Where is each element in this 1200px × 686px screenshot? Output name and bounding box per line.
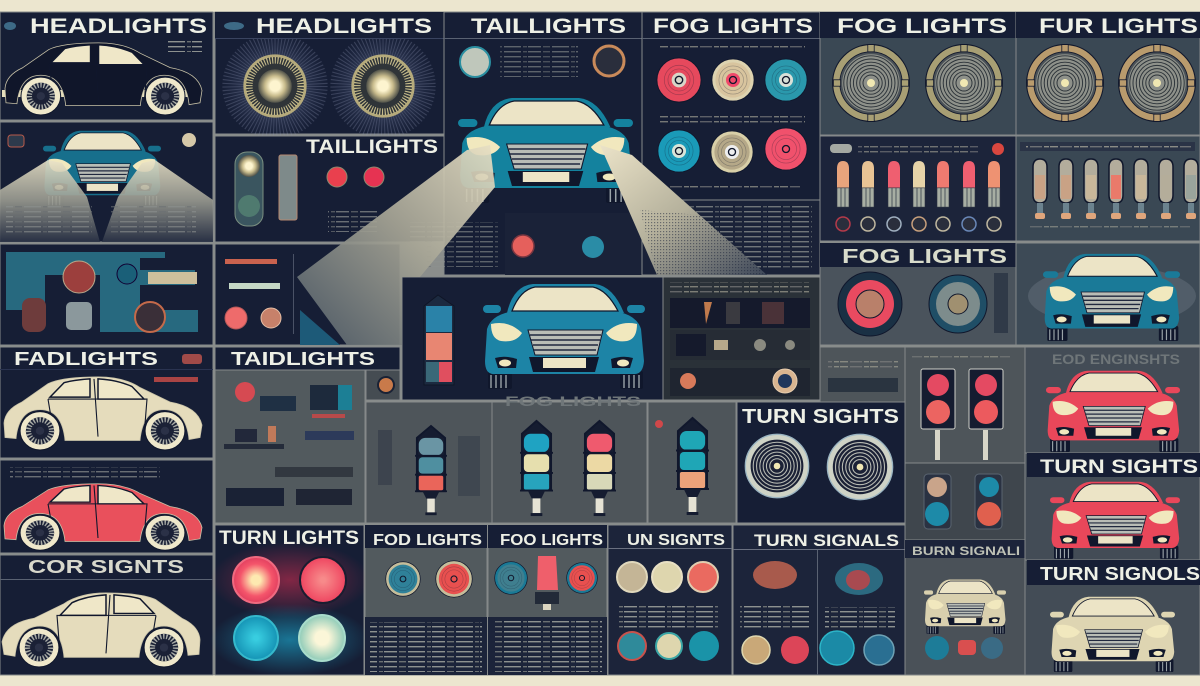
icon: red badge	[182, 354, 202, 364]
header band	[1016, 12, 1200, 38]
heading: taidlights: TAIDLIGHTS	[231, 349, 375, 369]
panel: turn sights red car	[1025, 453, 1200, 560]
lens left	[833, 45, 909, 121]
disc red	[781, 636, 809, 664]
header rule	[733, 549, 905, 550]
lens teal	[765, 59, 807, 101]
heading: un signts: UN SIGNTS	[627, 532, 725, 549]
parts left	[378, 430, 392, 485]
text right	[825, 607, 895, 629]
text block	[488, 617, 607, 675]
disc 2	[652, 562, 682, 592]
text lines	[690, 206, 812, 268]
panel: turn signals	[733, 525, 905, 675]
car: blue	[1043, 254, 1180, 341]
header rule	[0, 579, 213, 580]
strip	[279, 155, 297, 220]
panel: grey bulbs	[1016, 136, 1200, 241]
panel: black car headlights	[0, 12, 213, 120]
signal right	[975, 474, 1002, 529]
heading: turn sights: TURN SIGHTS	[742, 406, 899, 428]
header band	[905, 540, 1025, 558]
panel: dark bulbs	[820, 136, 1016, 241]
label lines	[858, 144, 978, 153]
beam: main right	[600, 145, 767, 275]
heading: fog lights: FOG LIGHTS	[842, 246, 1007, 268]
text lines	[328, 210, 378, 232]
text lines	[10, 467, 160, 479]
heading: burn signali: BURN SIGNALI	[912, 544, 1020, 558]
gauge core	[846, 570, 870, 590]
red bits	[22, 298, 46, 332]
lamp blue	[495, 562, 527, 594]
beam text	[6, 204, 92, 234]
lamp left	[225, 307, 247, 329]
spiral right	[827, 434, 893, 500]
text lines	[494, 620, 602, 672]
header rule	[642, 38, 820, 39]
icon labels	[828, 360, 898, 370]
car: black side view	[2, 43, 202, 115]
label	[412, 283, 482, 286]
text left	[410, 222, 498, 267]
icon: red	[958, 640, 976, 655]
target core	[778, 374, 792, 388]
panel: taillights	[215, 136, 444, 242]
tile row 3	[670, 368, 810, 396]
heading: fadlights: FADLIGHTS	[14, 349, 158, 369]
heading: taillights: TAILLIGHTS	[306, 137, 438, 158]
header band	[365, 525, 487, 548]
labels	[660, 46, 805, 51]
header band	[1027, 560, 1200, 585]
divider	[817, 550, 818, 675]
small red lamp	[512, 235, 534, 257]
panel: taidlights parts	[215, 347, 400, 523]
text left	[740, 603, 810, 628]
red spiral	[63, 261, 95, 293]
header rule	[0, 369, 213, 370]
gauge left	[753, 561, 797, 589]
icon: teal	[981, 637, 1003, 659]
blue glow	[300, 310, 340, 345]
panel: headlight beams	[0, 122, 213, 242]
icon: teal ring	[460, 47, 490, 77]
spiral left	[745, 434, 809, 498]
pale bar	[229, 283, 280, 289]
icon: red	[992, 143, 1004, 155]
panel: red car top	[1025, 347, 1200, 453]
panel: red car	[0, 460, 213, 553]
lens pink	[765, 128, 807, 170]
icon: blue	[925, 636, 949, 660]
car: cream small	[924, 580, 1006, 634]
panel: colored signals	[905, 463, 1025, 540]
panel: blue car	[1016, 243, 1200, 345]
header rule	[608, 548, 732, 549]
panel: burn signali car	[905, 540, 1025, 675]
icon: small left	[8, 135, 24, 147]
dark block right	[310, 385, 352, 410]
lens red	[838, 272, 902, 336]
parts panel	[215, 370, 365, 523]
panel: turn lights	[210, 525, 370, 676]
orange part	[268, 426, 276, 442]
panel: fog lights lens pair	[820, 243, 1016, 345]
car: blue front	[483, 284, 645, 389]
lamp column	[235, 152, 263, 226]
tan bar	[148, 272, 197, 284]
stacked bars	[225, 259, 277, 264]
parts right	[458, 436, 480, 496]
heading: turn signols: TURN SIGNOLS	[1040, 564, 1200, 584]
labels row 3	[670, 186, 800, 190]
lamp pink 1	[233, 557, 279, 603]
panel: small badge	[366, 370, 400, 400]
car: cream	[1050, 597, 1175, 672]
header band	[820, 12, 1016, 38]
panel: taillights car	[410, 12, 642, 275]
gauge right	[835, 563, 883, 595]
car: teal front	[458, 98, 633, 203]
headlight glow	[1028, 266, 1196, 326]
header rule	[215, 38, 444, 39]
disc 3	[688, 562, 718, 592]
heading: headlights: HEADLIGHTS	[256, 15, 432, 38]
heading: turn lights: TURN LIGHTS	[219, 528, 359, 549]
heading: turn sights: TURN SIGHTS	[1040, 457, 1198, 478]
blue ring	[117, 264, 137, 284]
lens left	[1027, 45, 1103, 121]
icon: oval	[830, 144, 852, 153]
inner panel	[505, 213, 642, 275]
panel: fur lights	[1016, 12, 1200, 135]
red bulb	[535, 556, 559, 610]
disc blue	[864, 635, 894, 665]
mini labels	[500, 43, 578, 77]
red stripe	[312, 414, 345, 418]
label lines	[1026, 144, 1191, 149]
panel: lamps column	[366, 402, 492, 523]
small lamp	[680, 373, 696, 389]
car: red	[1046, 371, 1180, 452]
red dot	[655, 420, 663, 428]
lamp cream	[299, 615, 345, 661]
red part	[235, 382, 255, 402]
panel: fadlights cream car	[0, 347, 213, 458]
disc 5	[656, 633, 682, 659]
panel: turn sights	[737, 402, 905, 523]
lens tan	[711, 131, 753, 173]
blue glow	[210, 604, 370, 676]
divider	[293, 254, 294, 334]
panel: un signts	[608, 525, 732, 675]
captions	[1030, 226, 1190, 231]
icon: orange ring	[594, 46, 624, 76]
text lines	[166, 40, 202, 52]
text block	[365, 617, 487, 675]
header band	[215, 12, 444, 38]
icon group	[828, 378, 898, 392]
label lines	[670, 282, 810, 294]
dashboard blocks	[6, 252, 198, 332]
heading: fod lights: FOD LIGHTS	[373, 532, 482, 549]
panel: headlight lenses	[215, 12, 444, 140]
panel: blue car front	[402, 277, 663, 409]
beam: left	[0, 160, 100, 242]
disc 1	[617, 562, 647, 592]
icon: small right	[182, 133, 196, 147]
label strip	[1020, 142, 1195, 151]
panel: red signal lights	[905, 347, 1025, 463]
traffic light red	[583, 421, 616, 516]
lens red	[657, 58, 701, 102]
beam texture	[640, 210, 767, 275]
caption	[912, 355, 1010, 358]
part row	[235, 429, 257, 442]
faint heading: EOD ENGINSHTS	[1052, 351, 1180, 367]
red tail right	[364, 167, 384, 187]
lamp cyan	[234, 616, 278, 660]
lens right	[1119, 45, 1195, 121]
lamp pink 2	[300, 557, 346, 603]
disc 4	[618, 632, 646, 660]
side icons	[994, 273, 1008, 333]
heading: fog lights: FOG LIGHTS	[837, 15, 1007, 38]
panel: two traffic lights	[492, 402, 647, 523]
text lines	[370, 622, 482, 672]
header band	[820, 243, 1016, 267]
header rule	[444, 38, 642, 39]
small blue lamp	[582, 236, 604, 258]
traffic light teal	[676, 418, 709, 515]
disc teal	[820, 631, 854, 665]
lamp red	[567, 563, 597, 593]
faint heading: FOG LIGHTS	[505, 393, 641, 409]
red tag	[154, 377, 198, 382]
heading: foo lights: FOO LIGHTS	[500, 532, 603, 549]
car: blue front	[43, 131, 161, 206]
panel: fod lights	[365, 525, 487, 675]
heading: fog lights: FOG LIGHTS	[653, 15, 813, 38]
panel: small icons	[820, 347, 905, 402]
heading: headlights: HEADLIGHTS	[30, 15, 207, 38]
lamp bottom	[238, 195, 260, 217]
row bar	[224, 444, 284, 449]
car: red	[4, 484, 202, 550]
bulbs	[1033, 159, 1198, 219]
signal left	[921, 369, 955, 460]
grey box	[66, 302, 92, 330]
heading: turn signals: TURN SIGNALS	[754, 532, 899, 550]
beam text right	[110, 204, 196, 234]
traffic light blue	[520, 421, 553, 516]
sockets	[836, 217, 1001, 231]
panel: foo lights	[488, 525, 607, 675]
panel: beam panel	[215, 244, 400, 345]
beam: right	[102, 160, 213, 242]
target lamp	[773, 369, 797, 393]
tile row 2	[670, 330, 810, 360]
lens blue	[658, 130, 700, 172]
icon: oval	[224, 22, 244, 30]
panel: fog lights gold	[820, 12, 1016, 135]
lamp blue	[386, 562, 420, 596]
lens left	[221, 32, 329, 140]
teal accent	[338, 385, 352, 410]
panel: photo tiles	[663, 277, 820, 400]
dark box left	[226, 488, 284, 506]
signal right	[969, 369, 1003, 460]
heading: fur lights: FUR LIGHTS	[1039, 15, 1198, 38]
header band	[488, 525, 607, 548]
beam: main left	[297, 145, 495, 345]
text lines	[618, 606, 718, 631]
heading: taillights: TAILLIGHTS	[471, 15, 626, 38]
disc tan	[742, 636, 770, 664]
lamp right	[261, 308, 281, 328]
car: cream	[4, 377, 202, 450]
car: red	[1050, 482, 1180, 559]
panel: fog text	[642, 200, 820, 275]
panel: blue dashboard	[0, 244, 213, 345]
icon: orange badge	[378, 377, 394, 393]
lens right	[329, 32, 437, 140]
header band	[1027, 453, 1200, 477]
panel: single traffic light	[648, 402, 736, 523]
car: cream flipped	[2, 593, 200, 667]
row pieces	[275, 467, 353, 477]
lamp red	[436, 561, 472, 597]
bar	[305, 431, 354, 440]
dark block	[260, 396, 296, 411]
red glow	[210, 542, 370, 618]
panel: turn signols cream car	[1025, 560, 1200, 675]
lens blue	[929, 275, 987, 333]
heading: cor signts: COR SIGNTS	[28, 557, 184, 577]
red tail left	[327, 167, 347, 187]
lens cream	[712, 59, 754, 101]
labels row 2	[660, 114, 805, 124]
disc 6	[690, 632, 718, 660]
gauge	[135, 302, 165, 332]
dark box right	[296, 489, 352, 505]
tile row 1	[670, 298, 810, 328]
panel: fog lights colored	[642, 12, 820, 200]
icon: badge	[4, 22, 16, 30]
traffic light	[415, 426, 447, 515]
signal left	[924, 474, 951, 529]
bulbs	[837, 161, 1000, 207]
panel: signts cream car	[0, 555, 213, 675]
traffic signal	[424, 295, 454, 385]
lens right	[926, 45, 1002, 121]
lamp top	[238, 155, 260, 177]
